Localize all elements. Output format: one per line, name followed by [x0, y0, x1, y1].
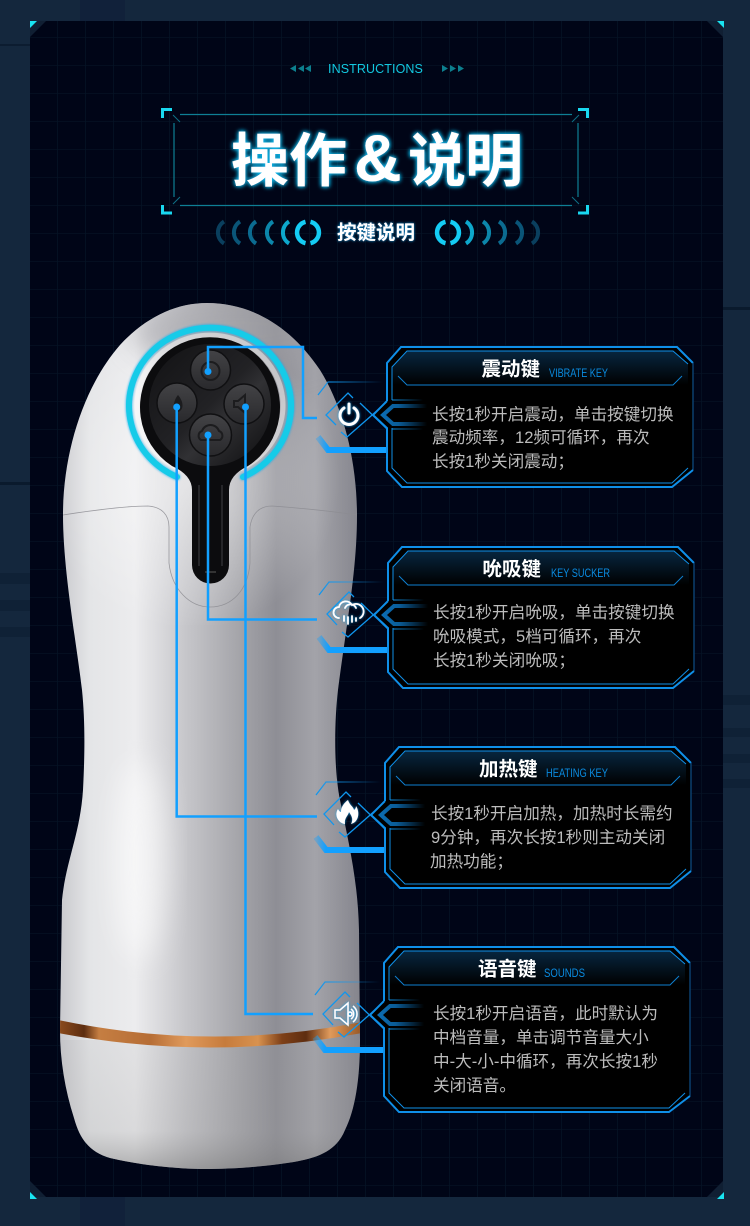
icon: flame — [336, 800, 358, 824]
button: sound — [224, 384, 264, 424]
panel: suction key: KEY SUCKER — [551, 566, 610, 580]
product body — [50, 290, 370, 1175]
button: vibrate — [190, 350, 230, 390]
description — [432, 405, 674, 471]
copper band — [58, 1020, 362, 1048]
connector — [318, 382, 388, 450]
description: 长按1秒开启加热，加热时长需约 — [431, 804, 673, 823]
description: 长按1秒关闭震动； — [432, 452, 574, 471]
frame — [371, 747, 691, 888]
subtitle with arc decorations: 按键说明 — [337, 221, 415, 244]
label: instructions: INSTRUCTIONS — [328, 62, 423, 76]
control pad — [140, 337, 280, 584]
description: 中档音量，单击调节音量大小 — [433, 1028, 649, 1047]
ring halo — [137, 335, 283, 469]
title: & — [354, 121, 402, 195]
frame — [374, 547, 694, 688]
description: 关闭语音。 — [433, 1076, 516, 1095]
heading: 吮吸键 — [482, 558, 542, 580]
leader lines — [173, 347, 317, 1014]
title — [231, 121, 523, 195]
description: 加热功能； — [430, 852, 513, 871]
frame — [373, 347, 693, 487]
button: heat — [157, 383, 197, 423]
title: 操 — [231, 129, 289, 194]
panel: sound key — [315, 947, 690, 1112]
description — [433, 1004, 658, 1095]
panel: vibrate key: VIBRATE KEY — [549, 366, 608, 380]
button: suction — [190, 414, 232, 456]
connector — [315, 982, 385, 1050]
title: 明 — [465, 129, 523, 194]
panel: vibrate key — [318, 347, 693, 487]
description: 中-大-小-中循环，再次长按1秒 — [433, 1052, 658, 1071]
title frame — [162, 110, 588, 213]
description: 长按1秒开启语音，此时默认为 — [433, 1004, 658, 1023]
connector — [319, 582, 389, 650]
subtitle with arc decorations — [218, 221, 538, 244]
description: 长按1秒开启吮吸，单击按键切换 — [433, 603, 675, 622]
panel: suction key — [319, 547, 694, 688]
description — [430, 804, 673, 871]
frame — [370, 947, 690, 1112]
description: 长按1秒开启震动，单击按键切换 — [432, 405, 674, 424]
connector — [316, 782, 386, 850]
heading: 加热键 — [479, 758, 538, 780]
icon: power — [340, 404, 358, 424]
label: instructions — [290, 62, 464, 76]
seam lines — [63, 506, 357, 607]
panel: sound key: SOUNDS — [544, 966, 585, 980]
heading: 震动键 — [482, 358, 541, 380]
title: 作 — [289, 129, 347, 194]
description — [433, 603, 675, 670]
cyan ring — [129, 328, 291, 477]
description: 吮吸模式，5档可循环，再次 — [433, 627, 641, 646]
title: 说 — [408, 129, 466, 194]
icon: speaker — [335, 1003, 357, 1025]
heading: 语音键 — [478, 958, 537, 980]
icon: cloud — [334, 601, 364, 624]
description: 震动频率，12频可循环，再次 — [432, 428, 650, 447]
description: 长按1秒关闭吮吸； — [433, 651, 575, 670]
panel: heating key: HEATING KEY — [546, 766, 608, 780]
description: 9分钟，再次长按1秒则主动关闭 — [431, 828, 665, 847]
panel: heating key — [316, 747, 691, 888]
